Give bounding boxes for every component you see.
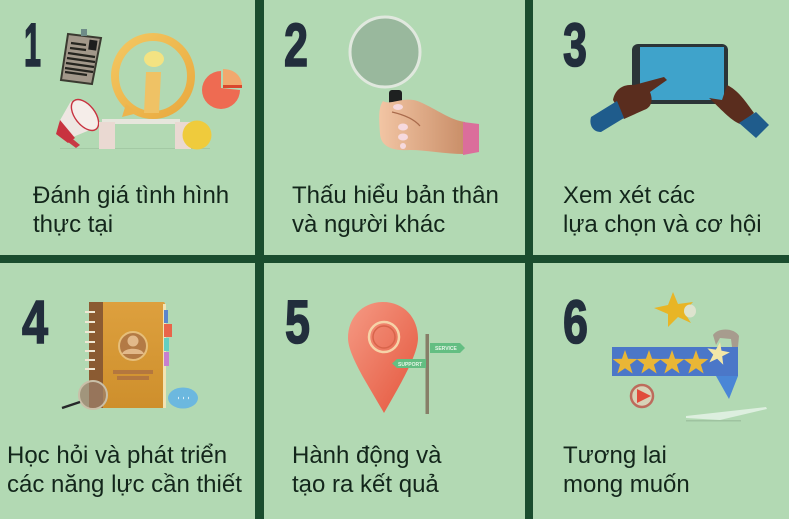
step 2 caption: và người khác bbox=[292, 211, 445, 238]
panel: step 2 bbox=[284, 11, 499, 238]
number 4: 4 bbox=[22, 288, 48, 356]
icon: signpost: SERVICE bbox=[435, 346, 458, 352]
icon: pie chart bbox=[202, 69, 242, 109]
step 4 caption: các năng lực cần thiết bbox=[7, 471, 242, 498]
step 4 caption: Học hỏi và phát triển bbox=[7, 442, 227, 469]
icon: right hand bbox=[709, 85, 769, 138]
panel: step 3 bbox=[563, 11, 769, 238]
panel: step 6 bbox=[563, 288, 767, 498]
step 2 caption: Thấu hiểu bản thân bbox=[292, 182, 499, 209]
step 1 caption: thực tại bbox=[33, 211, 113, 238]
step 3 caption: Xem xét các bbox=[563, 182, 695, 209]
number 3: 3 bbox=[563, 11, 587, 79]
icon: info speech ring bbox=[115, 37, 191, 117]
icon: large star bbox=[654, 292, 696, 327]
panel: step 1 bbox=[24, 11, 242, 238]
panel: step 5 bbox=[285, 288, 465, 498]
icon: magnifier bbox=[62, 381, 107, 409]
number 2: 2 bbox=[284, 11, 308, 79]
step 5 caption: Hành động và bbox=[292, 442, 442, 469]
icon: notebook bbox=[85, 302, 172, 408]
icon: platform bbox=[686, 407, 767, 422]
step 3 caption: lựa chọn và cơ hội bbox=[563, 211, 762, 238]
icon: signpost: SUPPORT bbox=[398, 362, 422, 368]
number 6: 6 bbox=[563, 288, 588, 356]
icon: map pin bbox=[348, 302, 418, 413]
panel: step 4 bbox=[7, 288, 242, 498]
icon: rating bubble bbox=[612, 329, 739, 399]
icon: clipboard bbox=[61, 29, 101, 84]
step 6 caption: Tương lai bbox=[563, 442, 667, 469]
step 6 caption: mong muốn bbox=[563, 471, 690, 498]
icon: chat bubble bbox=[168, 388, 198, 408]
step 5 caption: tạo ra kết quả bbox=[292, 471, 439, 498]
icon: coin bbox=[182, 120, 212, 150]
icon: hand with magnifier bbox=[350, 17, 479, 155]
number 1: 1 bbox=[24, 11, 41, 79]
icon: left hand bbox=[590, 77, 667, 132]
icon: megaphone bbox=[56, 95, 104, 148]
number 5: 5 bbox=[285, 288, 310, 356]
icon: tablet bbox=[632, 44, 728, 104]
step 1 caption: Đánh giá tình hình bbox=[33, 182, 229, 209]
icon: play button bbox=[631, 385, 653, 407]
icon: signpost bbox=[392, 334, 465, 414]
icon: pedestal bbox=[60, 119, 210, 149]
